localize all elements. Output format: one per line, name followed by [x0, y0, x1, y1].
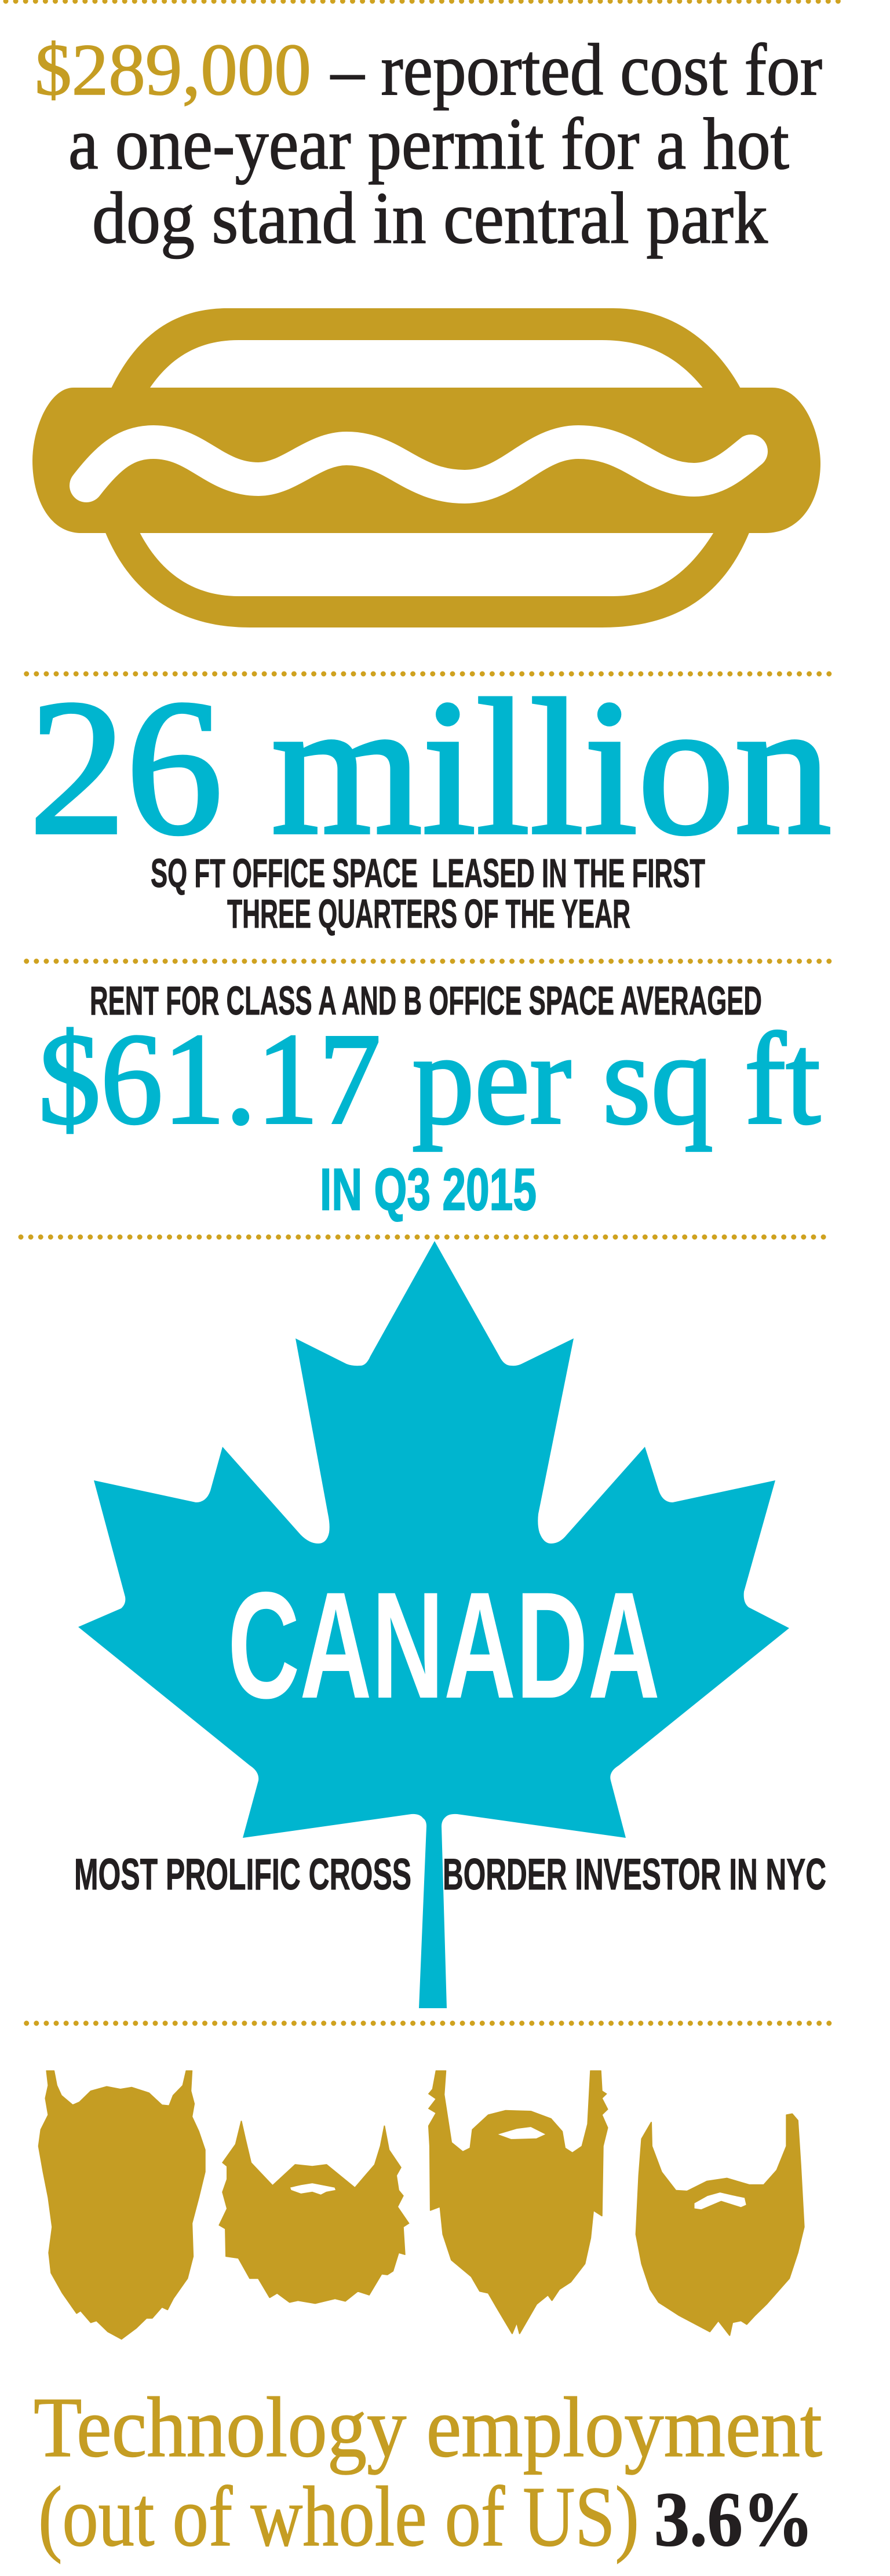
- beard 4: [636, 2114, 804, 2336]
- big number: 26 million: 26 million: [29, 660, 831, 875]
- heading: hot dog permit cost: [35, 30, 822, 259]
- mustard squiggle: [86, 442, 751, 487]
- beard 3: [429, 2071, 608, 2334]
- beard 1: [39, 2071, 205, 2339]
- caption: in Q3 2015: IN Q3 2015: [320, 1156, 537, 1223]
- caption: office space leased: [151, 851, 705, 936]
- caption: most prolific cross-border investor: [74, 1850, 826, 1899]
- icon: maple leaf with Canada label: [78, 1241, 789, 2008]
- beard 2: [219, 2121, 409, 2304]
- heading: hot dog permit cost: dog stand in central park: [92, 178, 768, 259]
- heading: hot dog permit cost: a one-year permit for a hot: [68, 104, 789, 185]
- label: Canada: CANADA: [228, 1560, 660, 1730]
- heading: hot dog permit cost: $289,000: [35, 30, 311, 111]
- heading: hot dog permit cost: – reported cost for: [330, 30, 822, 111]
- caption: most prolific cross-border investor: MOST PROLIFIC CROSS: [74, 1850, 411, 1899]
- heading: technology employment: [34, 2380, 822, 2564]
- heading: technology employment: (out of whole of US): [38, 2469, 639, 2564]
- heading: technology employment: Technology employment: [34, 2380, 822, 2475]
- big number: rent per square foot: $61.17 per sq ft: [38, 1006, 820, 1151]
- stat: 3.6 percent: 3.6%: [654, 2476, 814, 2562]
- caption: office space leased: THREE QUARTERS OF THE YEAR: [227, 891, 630, 936]
- icon: four beards: [39, 2071, 804, 2339]
- icon: hot dog: [32, 308, 820, 627]
